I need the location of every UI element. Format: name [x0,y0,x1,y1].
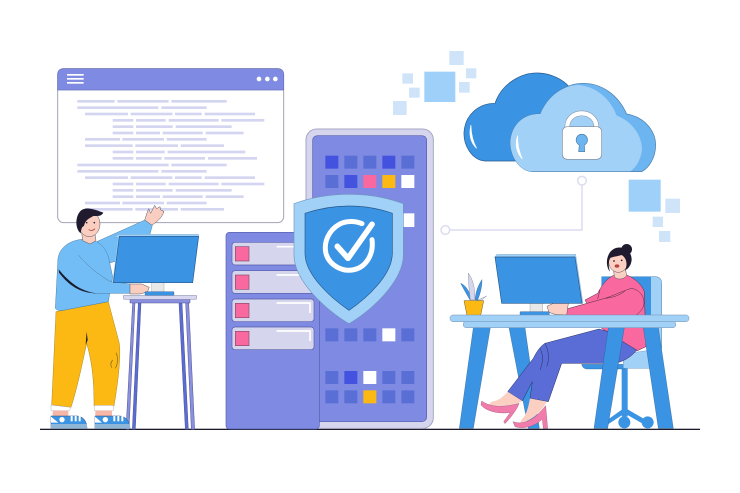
icon: blue back cloud [464,73,569,161]
tall server tower [306,129,433,428]
icon: desktop monitor [495,254,583,315]
panel: cloud lock and connector [393,51,680,242]
ground line [40,429,700,430]
icon: raised hand [145,205,164,225]
icon: potted plant [461,273,487,315]
figure: man [51,205,164,429]
panel: woman working at desk [450,244,689,428]
icon: light front cloud [510,83,656,172]
desk rear leg behind the woman's legs [509,328,539,428]
desk [450,315,689,428]
icon: padlock [562,113,602,159]
figure: woman [481,244,646,428]
panel: code browser window [58,69,284,223]
icon: desktop monitor [112,234,199,295]
decorative data squares, upper left [393,51,476,115]
decorative data squares, right [629,180,680,242]
office chair [582,277,662,428]
icon: standing table [123,295,197,429]
icon: security shield with check mark [294,194,403,324]
connector line with end nodes [441,176,586,234]
panel: standing man at monitor [51,205,199,429]
panel: server racks [226,129,433,429]
short server unit [226,232,319,429]
